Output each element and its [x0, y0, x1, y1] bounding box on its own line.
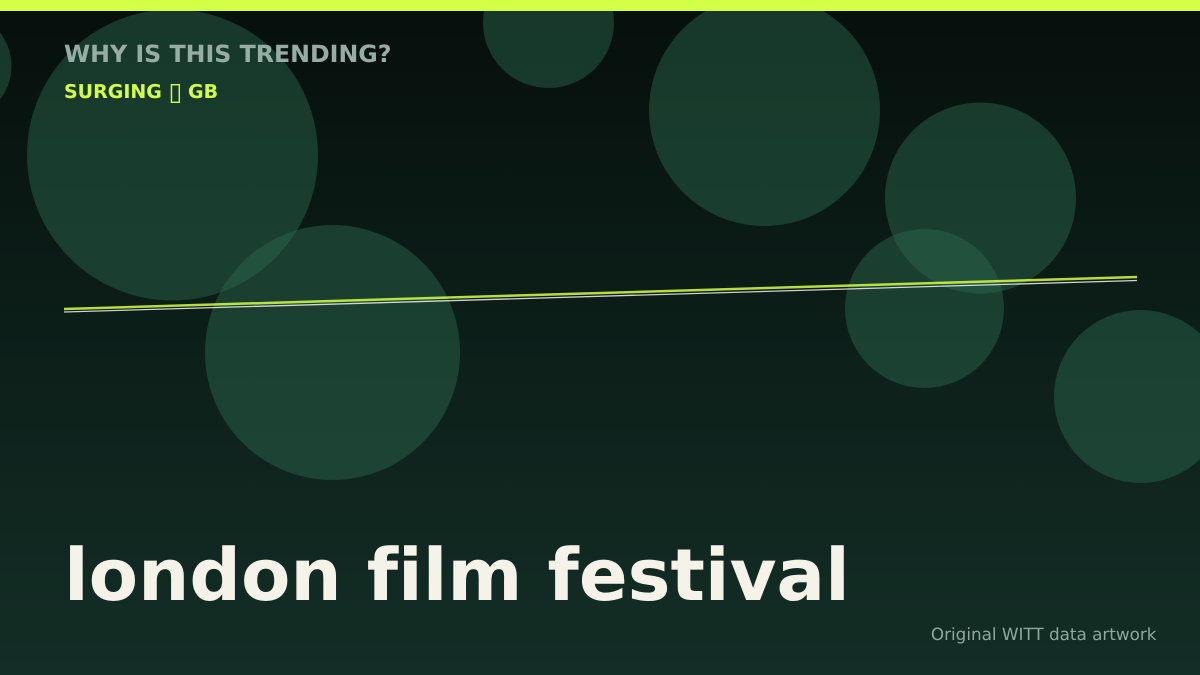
status line: SURGING: [64, 81, 162, 103]
bubble: mid right: [845, 229, 1004, 388]
trend line: pale stroke: [64, 280, 1137, 312]
bubble: upper right: [885, 102, 1076, 294]
title: london film festival: [64, 533, 850, 617]
trend line: [64, 277, 1137, 312]
trend line: lime stroke: [64, 277, 1137, 309]
bubble: top centre: [483, 0, 614, 88]
bubble: far right: [1054, 310, 1200, 483]
bubble cluster: [0, 0, 1200, 483]
status line: GB: [188, 81, 218, 103]
credit: Original WITT data artwork: [931, 624, 1157, 644]
bubble: large centre left: [205, 225, 460, 480]
status line: ▯: [168, 77, 182, 106]
bubble: top centre right: [649, 0, 880, 226]
top accent bar: [0, 0, 1200, 11]
heading: why is this trending: WHY IS THIS TRENDING?: [64, 40, 391, 68]
bubble: far left: [0, 12, 12, 120]
bubble: large top left: [27, 10, 318, 300]
